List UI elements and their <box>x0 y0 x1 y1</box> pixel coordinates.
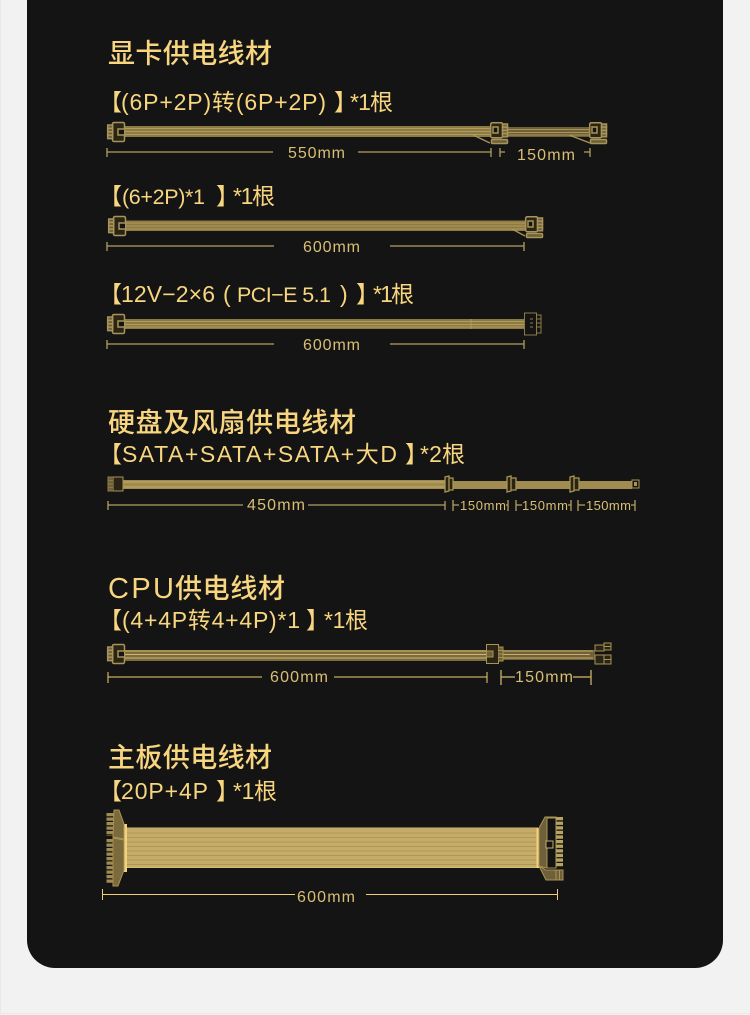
label: 6P+2P to 6P+2P: 【 <box>99 89 122 115</box>
label: SATA: *2根 <box>420 441 465 467</box>
dimension: 150mm segments: 150mm <box>522 498 568 513</box>
dimension: 150mm: 150mm <box>517 147 575 164</box>
label: 12V-2x6: ( <box>223 281 231 307</box>
heading: CPU cables: 供电线材 <box>175 574 285 604</box>
label: 4+4P: 【 <box>99 607 122 633</box>
label: SATA: 】 <box>405 441 428 467</box>
dimension: 450mm <box>108 497 445 514</box>
heading: motherboard cables: 主板供电线材 <box>108 743 272 773</box>
dimension: 600mm <box>107 239 524 256</box>
label: 6+2P: *1根 <box>233 183 275 209</box>
label: 12V-2x6: 【 <box>99 281 122 307</box>
dimension: 600mm <box>107 337 524 354</box>
heading: CPU cables <box>108 573 285 605</box>
label: 20P+4P <box>99 778 277 804</box>
label: 12V-2x6 <box>99 281 414 307</box>
dimension: 600mm: 600mm <box>297 889 355 906</box>
label: 20P+4P: *1根 <box>233 778 277 804</box>
label: 20P+4P: 】 <box>216 778 239 804</box>
cable: SATA <box>108 476 639 492</box>
dimension: 600mm <box>108 669 487 686</box>
dimension: 600mm: 600mm <box>270 669 328 686</box>
dimension: 150mm <box>501 669 591 686</box>
label: 20P+4P: 20P+4P <box>121 778 208 804</box>
dimension: 550mm: 550mm <box>288 145 345 162</box>
heading: drive and fan cables: 硬盘及风扇供电线材 <box>108 408 356 438</box>
label: 12V-2x6: 12V−2×6 <box>121 281 215 307</box>
label: 6P+2P to 6P+2P <box>99 89 393 115</box>
label: 6+2P: 】 <box>216 183 239 209</box>
dimension: 150mm segments: 150mm <box>460 498 506 513</box>
label: 20P+4P: 【 <box>99 778 122 804</box>
cable: 6P+2P to 6P+2P <box>108 122 606 144</box>
label: 12V-2x6: ) <box>340 281 348 307</box>
label: 4+4P: (4+4P转4+4P)*1 <box>122 607 300 633</box>
cable: 12V-2x6 <box>108 313 541 335</box>
dimension: 600mm: 600mm <box>303 337 360 354</box>
label: SATA: SATA+SATA+SATA+大D <box>122 441 397 467</box>
cable: 6+2P <box>109 216 542 238</box>
dimension: 600mm <box>102 889 558 906</box>
label: 6P+2P to 6P+2P: *1根 <box>350 89 393 115</box>
label: 4+4P: 】 <box>306 607 329 633</box>
dimension: 550mm <box>107 145 491 162</box>
label: 6+2P <box>99 183 275 209</box>
dimension: 450mm: 450mm <box>247 497 305 514</box>
label: 4+4P: *1根 <box>324 607 368 633</box>
label: 6P+2P to 6P+2P: (6P+2P)转(6P+2P) <box>121 89 326 115</box>
label: 12V-2x6: 】 <box>356 281 379 307</box>
dimension: 150mm segments: 150mm <box>586 498 631 513</box>
label: 6+2P: (6+2P)*1 <box>122 185 205 209</box>
label: 6+2P: 【 <box>99 183 122 209</box>
cable: 4+4P <box>108 643 611 664</box>
dimension: 150mm: 150mm <box>515 669 573 686</box>
dimension: 600mm: 600mm <box>303 239 360 256</box>
dimension: 150mm segments <box>453 498 635 513</box>
dimension: 150mm <box>500 147 590 164</box>
label: 12V-2x6: PCI−E 5.1 <box>237 283 331 307</box>
label: 4+4P <box>99 607 368 633</box>
label: 6P+2P to 6P+2P: 】 <box>334 89 357 115</box>
heading: GPU cables: 显卡供电线材 <box>108 39 272 69</box>
cable: motherboard <box>110 810 563 886</box>
heading: CPU cables: CPU <box>108 573 174 605</box>
label: SATA: 【 <box>99 441 122 467</box>
label: 12V-2x6: *1根 <box>373 281 414 307</box>
